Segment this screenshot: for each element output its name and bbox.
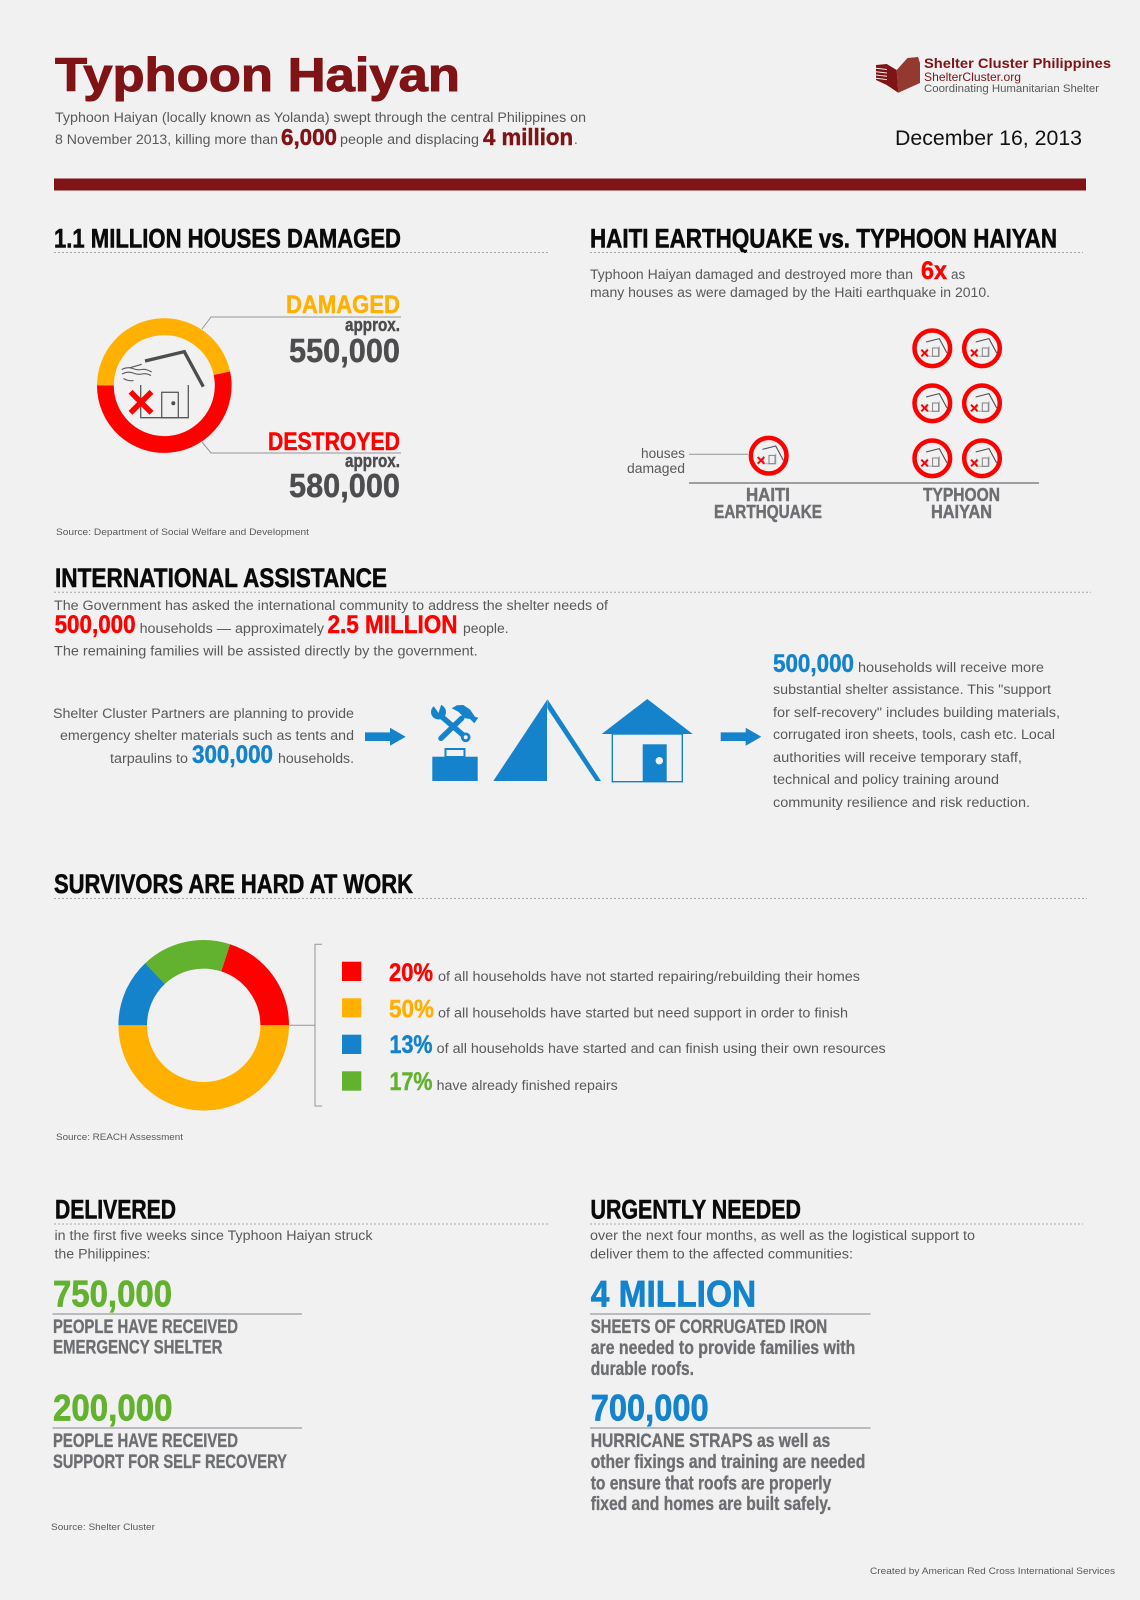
text: self-recovery support: community resilience and risk reduction. xyxy=(773,795,1030,810)
bracket connector xyxy=(289,944,322,1106)
text: urgently needed intro: deliver them to the affected communities: xyxy=(590,1246,853,1261)
icons: Haiti earthquake xyxy=(751,438,786,474)
donut chart: repair status xyxy=(133,954,275,1096)
label: Typhoon Haiyan: TYPHOON xyxy=(923,484,1000,505)
axis label: houses damaged: damaged xyxy=(627,461,685,476)
text: delivered intro: the Philippines: xyxy=(54,1246,150,1261)
stat: 750,000: EMERGENCY SHELTER xyxy=(53,1336,222,1358)
stat: 700,000: other fixings and training are needed xyxy=(591,1451,865,1473)
text: emergency shelter materials: tarpaulins to xyxy=(110,751,188,766)
text: delivered intro xyxy=(54,1228,373,1261)
text: 6x comparison: as xyxy=(951,267,965,282)
intro text: 8 November 2013, killing more than xyxy=(55,132,278,147)
label: Haiti earthquake: HAITI xyxy=(746,484,790,505)
callout: damaged: 550,000 xyxy=(289,333,400,370)
text: self-recovery support: technical and policy training around xyxy=(773,772,999,787)
stat: 750,000: PEOPLE HAVE RECEIVED xyxy=(53,1316,238,1338)
heading: Haiti vs Haiyan: HAITI EARTHQUAKE vs. TYPHOON HAIYAN xyxy=(590,224,1057,254)
legend: 20%: 20% xyxy=(389,959,433,987)
text: self-recovery support: corrugated iron sheets, tools, cash etc. Local xyxy=(773,727,1055,742)
stat: 700,000: HURRICANE STRAPS as well as xyxy=(591,1430,830,1452)
legend: 20%: of all households have not started repairing/rebuilding their homes xyxy=(438,969,860,984)
stat: 4 million xyxy=(590,1274,870,1380)
text: government request: people. xyxy=(463,621,509,636)
intro text: . xyxy=(574,132,578,147)
legend: 50%: 50% xyxy=(389,995,434,1023)
stat: 700,000: fixed and homes are built safely. xyxy=(591,1493,831,1515)
source: DSWD: Source: Department of Social Welfare and Development xyxy=(56,527,309,538)
callout: destroyed xyxy=(202,428,401,505)
text: urgently needed intro: over the next four months, as well as the logistical support to xyxy=(590,1228,975,1243)
legend: 50% xyxy=(342,995,848,1023)
intro text: people and displacing xyxy=(340,132,479,147)
text: delivered intro: in the first five weeks since Typhoon Haiyan struck xyxy=(54,1228,373,1243)
text: government request: 2.5 MILLION xyxy=(328,611,458,639)
legend: 13%: of all households have started and can finish using their own resources xyxy=(437,1041,886,1056)
stat: 200,000: PEOPLE HAVE RECEIVED xyxy=(53,1430,238,1452)
text: emergency shelter materials: Shelter Cluster Partners are planning to provide xyxy=(53,706,354,721)
heading: 1.1 million houses damaged: 1.1 MILLION HOUSES DAMAGED xyxy=(54,224,401,254)
stat: 700,000 xyxy=(590,1388,870,1515)
heading: delivered: DELIVERED xyxy=(55,1194,176,1224)
icon: tools and toolbox xyxy=(431,702,478,781)
text: 6x comparison: many houses as were damaged by the Haiti earthquake in 2010. xyxy=(590,285,990,300)
label: Haiti earthquake xyxy=(714,484,822,522)
text: government request: 500,000 xyxy=(55,611,136,639)
legend: 13% xyxy=(342,1031,886,1059)
callout: damaged: DAMAGED xyxy=(286,291,400,319)
intro text: Typhoon Haiyan (locally known as Yolanda) swept through the central Philippines on xyxy=(55,110,586,125)
intro text xyxy=(55,110,586,150)
axis label: houses damaged: houses xyxy=(641,446,685,461)
legend: 17% xyxy=(342,1068,618,1096)
label: Haiti earthquake: EARTHQUAKE xyxy=(714,501,822,522)
text: 6x comparison xyxy=(590,257,990,300)
text: government request xyxy=(54,598,608,658)
icon: house xyxy=(602,699,693,782)
text: 6x comparison: 6x xyxy=(921,257,947,285)
arrow: to self-recovery xyxy=(721,728,761,746)
text: self-recovery support xyxy=(773,650,1060,810)
heading: survivors: SURVIVORS ARE HARD AT WORK xyxy=(54,869,413,899)
text: emergency shelter materials: households. xyxy=(278,751,354,766)
stat: 200,000: SUPPORT FOR SELF RECOVERY xyxy=(53,1451,287,1473)
title: Typhoon Haiyan xyxy=(55,48,460,101)
text: emergency shelter materials: emergency shelter materials such as tents and xyxy=(60,728,354,743)
stat: 700,000: 700,000 xyxy=(591,1388,709,1429)
stat: 4 million: are needed to provide families with xyxy=(591,1337,855,1359)
text: self-recovery support: authorities will receive temporary staff, xyxy=(773,750,1022,765)
callout: destroyed: 580,000 xyxy=(289,468,400,505)
text: government request: households — approximately xyxy=(140,621,324,636)
logo: Shelter Cluster Philippines xyxy=(876,56,1111,95)
logo: Shelter Cluster Philippines: Shelter Cluster Philippines xyxy=(924,56,1111,71)
legend: 13%: 13% xyxy=(390,1031,432,1059)
stat: 700,000: to ensure that roofs are properly xyxy=(591,1472,831,1494)
source: REACH: Source: REACH Assessment xyxy=(56,1132,183,1143)
legend: 50%: of all households have started but need support in order to finish xyxy=(438,1005,848,1020)
arrow: to materials xyxy=(365,728,406,746)
credit: Created by American Red Cross International Services xyxy=(870,1566,1115,1577)
heading: international assistance: INTERNATIONAL ASSISTANCE xyxy=(55,563,387,593)
text: 6x comparison: Typhoon Haiyan damaged and destroyed more than xyxy=(590,267,913,282)
intro text: 6,000 xyxy=(281,124,337,150)
logo: Shelter Cluster Philippines: Coordinating Humanitarian Shelter xyxy=(924,83,1099,95)
callout: destroyed: DESTROYED xyxy=(268,428,400,456)
text: government request: The Government has asked the international community to address the shelter needs of xyxy=(54,598,608,613)
text: self-recovery support: households will receive more xyxy=(858,660,1044,675)
donut: damaged vs destroyed xyxy=(105,327,223,445)
text: urgently needed intro xyxy=(590,1228,975,1261)
callout: destroyed: approx. xyxy=(345,451,400,471)
text: government request: The remaining families will be assisted directly by the government. xyxy=(54,644,478,658)
intro text: 4 million xyxy=(483,124,573,150)
stat: 750,000 xyxy=(52,1274,302,1358)
legend: 17%: 17% xyxy=(390,1068,432,1096)
callout: damaged xyxy=(202,291,401,370)
stat: 200,000: 200,000 xyxy=(53,1388,172,1429)
callout: damaged: approx. xyxy=(345,315,400,335)
stat: 750,000: 750,000 xyxy=(53,1274,172,1315)
date: December 16, 2013 xyxy=(895,127,1082,150)
axis label: houses damaged xyxy=(627,446,748,476)
stat: 4 million: 4 MILLION xyxy=(591,1274,756,1315)
legend: 17%: have already finished repairs xyxy=(437,1078,618,1093)
text: self-recovery support: 500,000 xyxy=(773,650,854,678)
text: emergency shelter materials xyxy=(53,706,354,769)
stat: 200,000 xyxy=(52,1388,302,1473)
label: Typhoon Haiyan xyxy=(923,484,1000,522)
chart: houses damaged pictogram xyxy=(627,330,1039,522)
stat: 4 million: durable roofs. xyxy=(591,1358,694,1380)
text: emergency shelter materials: 300,000 xyxy=(192,741,273,769)
heading: urgently needed: URGENTLY NEEDED xyxy=(590,1194,801,1224)
text: self-recovery support: substantial shelter assistance. This "support xyxy=(773,682,1051,697)
icons: Typhoon Haiyan xyxy=(914,330,1000,476)
source: Shelter Cluster: Source: Shelter Cluster xyxy=(51,1522,155,1533)
logo: Shelter Cluster Philippines: ShelterCluster.org xyxy=(924,70,1021,84)
legend: 20% xyxy=(342,959,860,987)
icon: tent xyxy=(493,699,601,781)
header bar xyxy=(54,178,1086,190)
stat: 4 million: SHEETS OF CORRUGATED IRON xyxy=(591,1316,827,1338)
text: self-recovery support: for self-recovery" includes building materials, xyxy=(773,705,1060,720)
label: Typhoon Haiyan: HAIYAN xyxy=(931,501,992,522)
